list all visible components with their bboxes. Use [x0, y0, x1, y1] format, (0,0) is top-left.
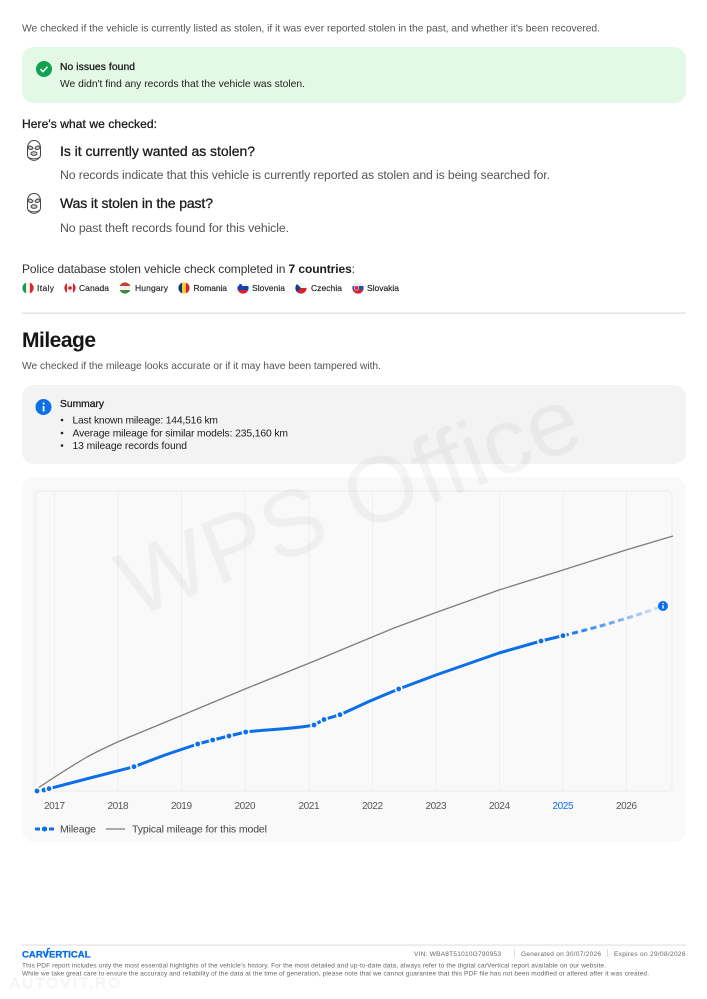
icon: balaclava mask [28, 194, 40, 213]
logo: carVertical: CARVERTICAL [22, 950, 91, 960]
icon: projection info [658, 601, 668, 611]
check item: stolen in past [28, 194, 289, 235]
section title: Mileage: Mileage [22, 329, 96, 352]
report metadata: Generated on 30/07/2026 [521, 951, 601, 958]
mileage record points [34, 632, 566, 794]
checked heading: Here's what we checked: [22, 117, 157, 131]
summary list: 13 mileage records found [72, 441, 187, 452]
x axis years: 2025 [552, 801, 574, 812]
country: Italy: Italy [37, 283, 55, 293]
country: Slovenia: Slovenia [252, 283, 285, 293]
x axis years: 2020 [234, 801, 256, 812]
flag: Canada [64, 282, 76, 294]
watermark: autovit: AUTOVIT.RO [10, 975, 120, 992]
police database statement: Police database stolen vehicle check completed in 7 countries: [22, 262, 355, 276]
watermark: WPS Office: WPS Office [104, 366, 594, 637]
x axis years: 2026 [616, 801, 637, 812]
x axis years: 2018 [108, 801, 129, 812]
legend: Mileage [60, 824, 96, 836]
report metadata: Expires on 29/08/2026 [614, 951, 686, 958]
section description: We checked if the mileage looks accurate or if it may have been tampered with. [22, 361, 381, 372]
report metadata [414, 949, 686, 958]
flag: Czechia [295, 282, 307, 294]
panel: summary [22, 385, 686, 464]
answer: No past theft records found for this vehicle. [60, 221, 289, 235]
report metadata: VIN: WBA8T51010G790953 [414, 951, 501, 958]
x axis years: 2019 [171, 801, 192, 812]
country: Romania: Romania [194, 283, 227, 293]
country: Slovakia: Slovakia [367, 283, 399, 293]
check item: currently wanted [28, 140, 550, 182]
status description: We didn't find any records that the vehicle was stolen. [60, 79, 305, 90]
x axis years: 2021 [298, 801, 320, 812]
x axis years: 2022 [362, 801, 383, 812]
panel: no issues found [22, 47, 686, 103]
icon: green check [36, 61, 52, 77]
projected mileage [563, 607, 660, 636]
question: Is it currently wanted as stolen? [60, 143, 255, 159]
legend [35, 824, 267, 836]
summary list: Last known mileage: 144,516 km [72, 416, 218, 426]
country: Hungary: Hungary [135, 283, 169, 293]
x axis years: 2024 [489, 801, 510, 812]
disclaimer: This PDF report includes only the most essential highlights of the vehicle's history. For the most detailed and up-to-date data, always refer to the digital carVertical report available on our website. [22, 962, 606, 970]
country list [22, 282, 399, 294]
x axis years: 2023 [426, 801, 447, 812]
typical mileage line [35, 536, 673, 790]
x axis years [44, 801, 637, 812]
intro text: We checked if the vehicle is currently listed as stolen, if it was ever reported stolen in the past, and whether it's been recovered. [22, 24, 600, 34]
icon: info [36, 399, 52, 415]
summary list [61, 416, 288, 452]
summary heading: Summary [60, 399, 105, 410]
question: Was it stolen in the past? [60, 195, 213, 211]
flag: Slovakia [352, 282, 364, 294]
country: Canada: Canada [79, 283, 109, 293]
x axis years: 2017 [44, 801, 65, 812]
summary list: Average mileage for similar models: 235,160 km [72, 428, 288, 440]
flag: Hungary [119, 282, 131, 294]
country: Czechia: Czechia [311, 283, 342, 293]
mileage line [36, 636, 563, 791]
flag: Slovenia [237, 282, 249, 294]
disclaimer [22, 962, 649, 978]
flag: Romania [178, 282, 190, 294]
disclaimer: While we take great care to ensure the accuracy and reliability of the data at the time of generation, please note that we cannot guarantee that this PDF file has not been modified or altered after it was created. [22, 970, 649, 978]
status heading: No issues found [60, 62, 135, 73]
answer: No records indicate that this vehicle is currently reported as stolen and is being searched for. [60, 168, 550, 182]
icon: balaclava mask [28, 140, 40, 160]
panel: mileage chart [22, 477, 686, 842]
legend: Typical mileage for this model [132, 824, 267, 836]
flag: Italy [22, 282, 34, 294]
